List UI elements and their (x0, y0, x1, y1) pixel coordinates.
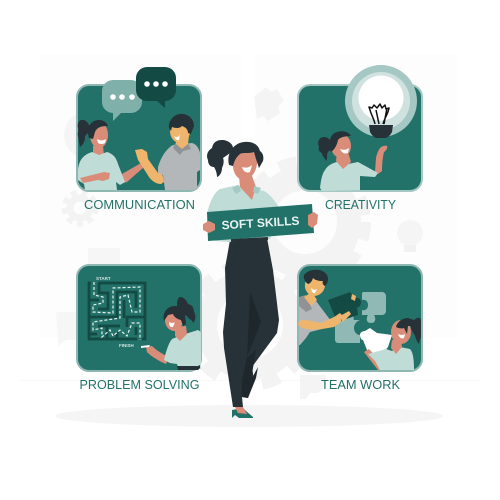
label: team work: TEAM WORK (321, 378, 401, 392)
speech bubble: dark (136, 67, 176, 108)
person: woman talking (78, 120, 144, 190)
puzzle pieces (328, 292, 392, 357)
maze (89, 276, 145, 348)
hands (203, 221, 215, 233)
person: man talking (135, 114, 200, 190)
ground shadow (55, 405, 443, 427)
label: communication: COMMUNICATION (84, 198, 195, 212)
label: problem solving: PROBLEM SOLVING (80, 378, 200, 392)
blouse (207, 185, 280, 242)
trousers (223, 238, 279, 407)
maze: FINISH (119, 343, 134, 348)
belt (231, 237, 268, 242)
sign: SOFT SKILLS (221, 214, 300, 232)
person: woman with puzzle (364, 318, 421, 370)
panel: team work (298, 265, 422, 371)
person: man with puzzle (298, 270, 356, 345)
panel: problem solving (77, 265, 201, 371)
panel: communication (77, 67, 201, 191)
person: woman drawing (141, 297, 201, 370)
sign (207, 204, 314, 241)
background decoration (20, 55, 480, 399)
label: creativity: CREATIVITY (325, 198, 397, 212)
maze: START (96, 276, 111, 281)
shoes (232, 407, 253, 418)
collar (232, 185, 261, 194)
speech bubble: light (102, 80, 142, 121)
icon: light bulb (345, 65, 417, 138)
person: main woman holding sign (203, 140, 318, 418)
neck (239, 176, 256, 200)
head (231, 144, 259, 182)
ponytail (207, 140, 233, 177)
hair (228, 142, 263, 168)
person: woman with idea (318, 131, 387, 191)
mouth (242, 165, 252, 172)
panel: creativity (298, 65, 422, 191)
